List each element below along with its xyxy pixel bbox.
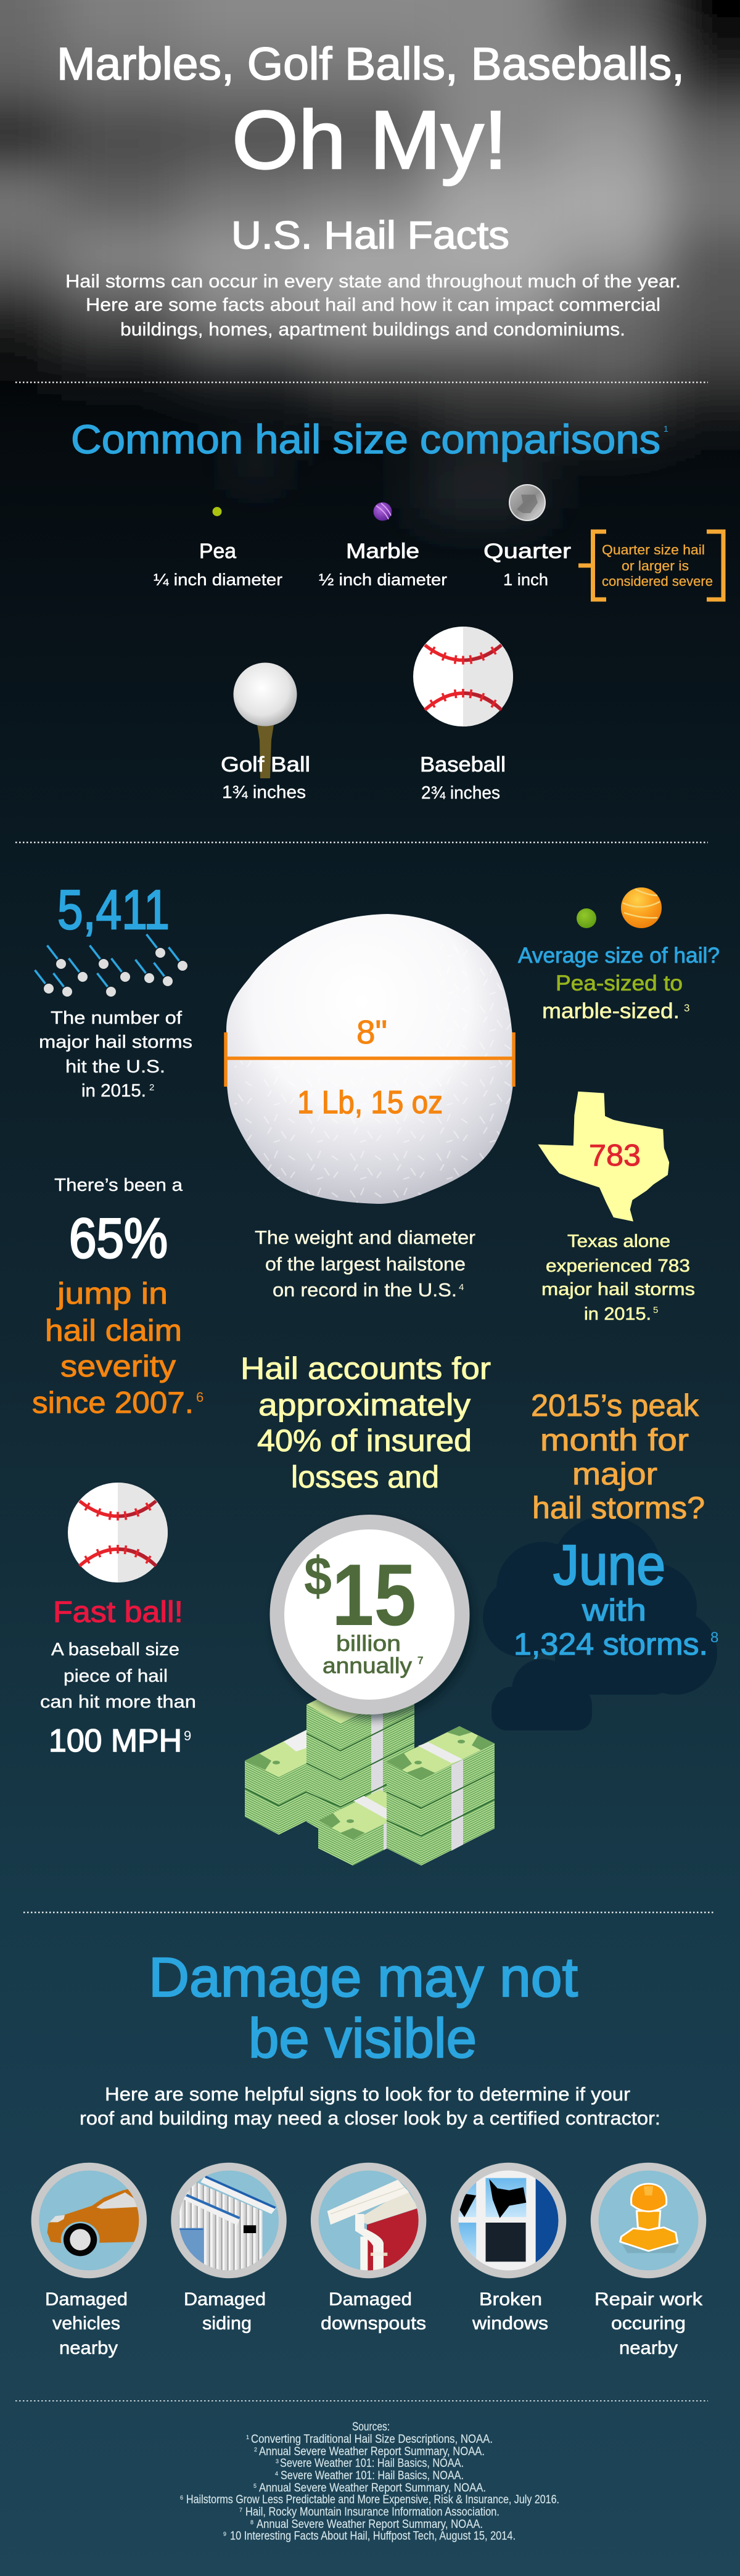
question: [531, 1388, 705, 1525]
sources: 5: [253, 2483, 257, 2489]
label: baseball: Baseball: [420, 753, 506, 776]
heading: be visible: [249, 2008, 477, 2070]
stat: 65% severity jump: [32, 1175, 204, 1420]
label: baseball: 2¾ inches: [421, 783, 500, 803]
question: hail storms?: [532, 1491, 705, 1525]
big number: 5,411: [57, 879, 170, 941]
caption: 2: [149, 1082, 154, 1093]
stat: peak month: [483, 1388, 718, 1730]
orange caption: severity: [60, 1350, 176, 1383]
title block: [57, 38, 684, 340]
speed: 100 MPH: [49, 1723, 182, 1759]
callout: severe hail bracket: considered severe: [602, 574, 713, 589]
question: 2015’s peak: [531, 1388, 699, 1423]
caption: major hail storms: [39, 1032, 192, 1052]
icon: damaged vehicle: [31, 2163, 147, 2278]
label: marble: Marble: [346, 540, 419, 563]
sources: Converting Traditional Hail Size Descriptions, NOAA.: [251, 2433, 493, 2446]
heading: [149, 1947, 578, 2070]
question: major: [572, 1457, 657, 1491]
label: repair work: [594, 2289, 703, 2358]
sources: Annual Severe Weather Report Summary, NOAA.: [257, 2518, 483, 2531]
intro paragraph: Hail storms can occur in every state and throughout much of the year.: [65, 271, 681, 292]
label: damaged siding: Damaged: [184, 2289, 266, 2310]
icon: dark storm clouds: [483, 1516, 717, 1730]
caption: hit the U.S.: [65, 1057, 165, 1077]
icon: repair worker: [591, 2163, 706, 2278]
title line 2: Oh My!: [232, 94, 508, 186]
label: broken windows: Broken: [479, 2289, 542, 2310]
intro paragraph: Here are some facts about hail and how it can impact commercial: [86, 295, 660, 315]
intro paragraph: Here are some helpful signs to look for to determine if your: [105, 2083, 630, 2105]
badge: $15 billion annually: annually: [323, 1653, 412, 1678]
caption: A baseball size: [51, 1640, 179, 1660]
caption: piece of hail: [64, 1666, 168, 1686]
sources: Annual Severe Weather Report Summary, NOAA.: [259, 2445, 485, 2458]
icon: pea: [212, 507, 222, 516]
heading: losses and: [291, 1460, 439, 1494]
sources: Hailstorms Grow Less Predictable and More Expensive, Risk & Insurance, July 2016.: [186, 2493, 559, 2506]
intro paragraph: roof and building may need a closer look by a certified contractor:: [80, 2107, 660, 2129]
label: pea: [154, 540, 282, 589]
label: golf ball: 1¾ inches: [222, 783, 306, 802]
sources: 1: [246, 2434, 249, 2440]
caption: in 2015.: [584, 1304, 651, 1324]
label: damaged downspouts: [321, 2289, 426, 2334]
label: damaged downspouts: Damaged: [329, 2289, 412, 2310]
icon: pea: [577, 908, 596, 928]
panel: damage may not be visible: [31, 1947, 706, 2358]
sources: Annual Severe Weather Report Summary, NOAA.: [259, 2482, 486, 2495]
caption: in 2015.: [81, 1081, 146, 1101]
title line 1: Marbles, Golf Balls, Baseballs,: [57, 38, 684, 89]
caption: [39, 1008, 192, 1101]
storm clouds background: [0, 0, 740, 512]
badge: $15 billion annually: billion: [336, 1631, 401, 1656]
money stack: tall: [306, 1668, 414, 1841]
hailstone: [226, 914, 530, 1209]
caption: major hail storms: [541, 1280, 695, 1299]
stat: insured losses: [240, 1351, 495, 1866]
heading: approximately: [258, 1388, 471, 1422]
illustration: stacks of money: [245, 1668, 495, 1866]
caption: [40, 1640, 196, 1712]
label: damaged downspouts: downspouts: [321, 2313, 426, 2334]
label: golf ball: [221, 753, 310, 802]
label: quarter: 1 inch: [503, 570, 548, 589]
subtitle: U.S. Hail Facts: [231, 214, 509, 257]
caption: on record in the U.S.: [273, 1279, 457, 1301]
caption: 5: [653, 1305, 658, 1315]
sources: 2: [254, 2446, 257, 2453]
answer: June: [553, 1534, 665, 1597]
heading: 40% of insured: [257, 1423, 472, 1458]
answer: 8: [710, 1629, 718, 1646]
icon: quarter: [509, 485, 545, 521]
sources: 4: [275, 2471, 278, 2477]
measure: weight: 1 Lb, 15 oz: [297, 1085, 443, 1121]
icon: baseball: [413, 627, 513, 726]
speed: 9: [184, 1728, 191, 1743]
sources: [180, 2421, 559, 2543]
label: marble: ½ inch diameter: [319, 570, 447, 589]
measure: diameter: 8": [356, 1014, 387, 1051]
orange caption: 6: [196, 1389, 204, 1405]
stat: Texas: [538, 1092, 695, 1324]
sources: 8: [250, 2519, 253, 2525]
badge: $15 billion annually: 7: [417, 1655, 423, 1666]
label: broken windows: windows: [472, 2313, 548, 2334]
sources: 10 Interesting Facts About Hail, Huffpost Tech, August 15, 2014.: [230, 2530, 516, 2543]
heading: [240, 1351, 491, 1494]
heading: Fast ball!: [53, 1596, 183, 1629]
measure: diameter: [226, 1014, 514, 1087]
intro: There’s been a: [54, 1175, 183, 1195]
money stack: left: [245, 1730, 340, 1835]
intro paragraph: [80, 2083, 660, 2129]
sources: Severe Weather 101: Hail Basics, NOAA.: [281, 2469, 464, 2482]
section heading: 1: [664, 424, 668, 434]
orange caption: [32, 1277, 204, 1420]
caption: The weight and diameter: [255, 1227, 475, 1248]
sources: Hail, Rocky Mountain Insurance Information Association.: [245, 2506, 500, 2519]
sources: Sources:: [352, 2421, 390, 2434]
stat: fast ball: [40, 1483, 196, 1759]
icon: falling hail: [35, 934, 187, 997]
callout: severe hail bracket: [578, 532, 723, 599]
caption: [255, 1227, 475, 1301]
money stack: right: [387, 1726, 495, 1866]
icon: broken window: [451, 2163, 566, 2278]
badge: $15 billion annually: [270, 1515, 473, 1719]
sources: 9: [223, 2531, 226, 2537]
label: pea: ¼ inch diameter: [154, 570, 282, 589]
question: month for: [540, 1423, 689, 1457]
callout: severe hail bracket: Quarter size hail: [602, 542, 705, 558]
orange caption: hail claim: [45, 1314, 182, 1348]
answer: marble-sized.: [542, 999, 680, 1023]
stat: largest hailstone: [226, 914, 530, 1301]
orange caption: jump in: [56, 1277, 168, 1311]
caption: experienced 783: [546, 1256, 690, 1276]
label: marble: [319, 540, 447, 589]
intro paragraph: [65, 271, 681, 340]
label: damaged vehicles: [45, 2289, 128, 2358]
number on map: 783: [589, 1139, 641, 1172]
label: quarter: [483, 540, 571, 589]
badge: $15 billion annually: 15: [332, 1546, 416, 1644]
money stack: front: [318, 1790, 414, 1866]
label: damaged vehicles: vehicles: [52, 2313, 120, 2334]
map: Texas: [538, 1092, 669, 1222]
panel: common hail size comparisons: [71, 416, 723, 803]
stat: average hail size: [518, 887, 720, 1023]
callout: severe hail bracket: or larger is: [622, 558, 689, 574]
caption: [541, 1232, 695, 1324]
label: broken windows: [472, 2289, 548, 2334]
icon: damaged downspout: [311, 2163, 426, 2278]
label: damaged siding: [184, 2289, 266, 2334]
stat: 5,411 storms: [35, 879, 192, 1101]
label: repair work: Repair work: [594, 2289, 703, 2310]
icon: golf ball on tee: [233, 662, 297, 778]
label: repair work: occuring: [611, 2313, 686, 2334]
caption: 4: [459, 1282, 464, 1293]
sources: Severe Weather 101: Hail Basics, NOAA.: [280, 2457, 464, 2470]
heading: Damage may not: [149, 1947, 578, 2009]
label: damaged siding: siding: [202, 2313, 252, 2334]
caption: The number of: [51, 1008, 183, 1028]
label: baseball: [420, 753, 506, 803]
label: repair work: nearby: [619, 2338, 678, 2358]
orange caption: since 2007.: [32, 1386, 194, 1420]
label: pea: Pea: [199, 540, 236, 563]
icon: baseball: [68, 1483, 168, 1582]
big number: 65%: [69, 1208, 168, 1270]
answer: Pea-sized to: [556, 971, 683, 995]
section heading: Common hail size comparisons: [71, 416, 660, 462]
answer: 1,324 storms.: [514, 1627, 708, 1661]
icon: damaged siding: [171, 2163, 287, 2278]
icon: marble: [374, 502, 392, 521]
sources: 7: [239, 2507, 242, 2513]
badge: $15 billion annually: $: [304, 1545, 332, 1607]
caption: Texas alone: [567, 1232, 670, 1251]
answer: [514, 1534, 718, 1661]
heading: Hail accounts for: [240, 1351, 491, 1386]
sources: 3: [276, 2458, 279, 2464]
icon: orange marble: [621, 887, 662, 928]
caption: can hit more than: [40, 1692, 196, 1712]
label: damaged vehicles: nearby: [59, 2338, 118, 2358]
answer: 3: [684, 1002, 689, 1014]
label: golf ball: Golf Ball: [221, 753, 310, 776]
sources: 6: [180, 2495, 183, 2501]
intro paragraph: buildings, homes, apartment buildings and condominiums.: [120, 319, 625, 340]
answer: with: [582, 1593, 646, 1627]
caption: of the largest hailstone: [265, 1253, 466, 1275]
label: damaged vehicles: Damaged: [45, 2289, 128, 2310]
label: quarter: Quarter: [483, 540, 571, 563]
question: Average size of hail?: [518, 944, 720, 968]
answer: [542, 971, 689, 1023]
